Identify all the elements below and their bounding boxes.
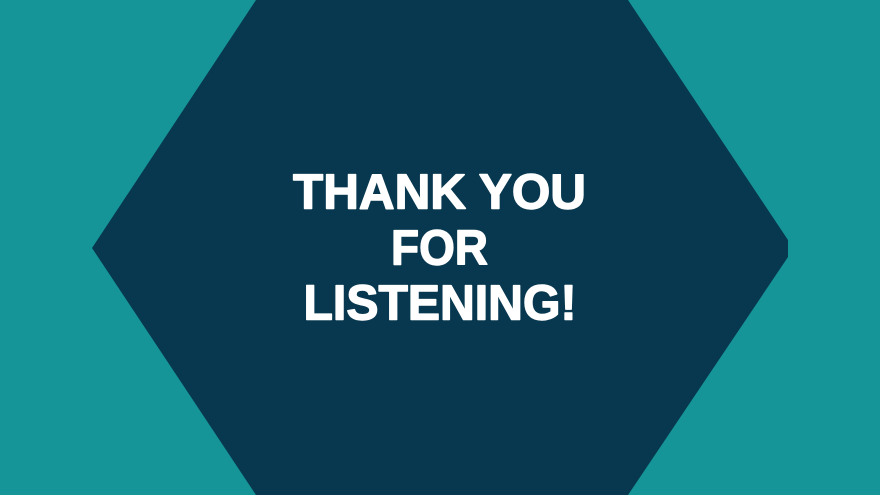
title: thank you message: LISTENING!: [304, 276, 576, 330]
title: thank you message: THANK YOU: [293, 164, 586, 220]
panel: navy hexagon: [92, 0, 788, 495]
title: thank you message: FOR: [391, 220, 488, 276]
title: thank you message: [293, 164, 586, 330]
